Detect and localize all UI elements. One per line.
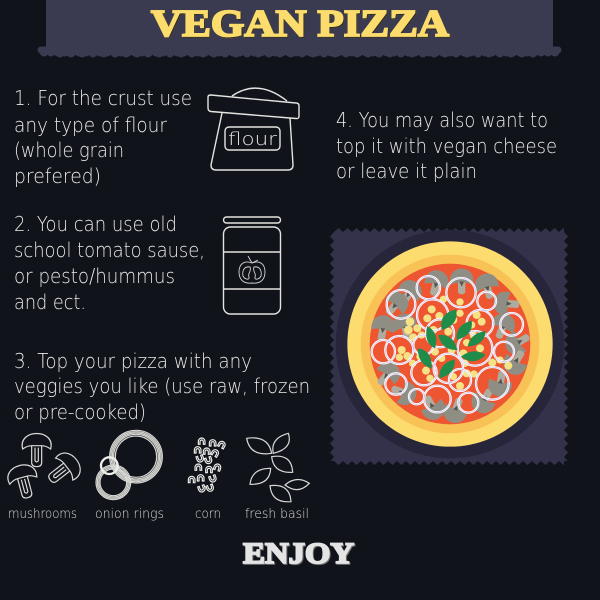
step 1 text: [14, 86, 192, 188]
mushrooms: [369, 268, 535, 426]
ingredient icons: [5, 430, 309, 502]
icon: mushrooms: [5, 433, 85, 501]
icon: flour bag: flour: [228, 129, 278, 150]
ingredient labels: [8, 507, 309, 522]
step 4 text: 4. You may also want to: [336, 108, 548, 132]
icon: flour bag: [208, 88, 299, 170]
step 2 text: and ect.: [14, 290, 86, 314]
step 3 text: veggies you like (use raw, frozen: [14, 374, 310, 398]
ingredient labels: onion rings: [95, 507, 164, 522]
pizza illustration: [336, 230, 564, 458]
step 3 text: [14, 349, 310, 424]
step 3 text: 3. Top your pizza with any: [14, 349, 252, 373]
step 2 text: 2. You can use old: [14, 212, 177, 236]
step 4 text: or leave it plain: [336, 159, 477, 183]
icon: fresh basil: [247, 433, 309, 502]
step 1 text: 1. For the crust use: [14, 86, 192, 110]
step 4 text: [336, 108, 557, 183]
banner: [41, 0, 558, 53]
tomato sauce: [370, 264, 530, 424]
plate: [336, 230, 564, 458]
ingredient labels: fresh basil: [245, 507, 309, 522]
step 2 text: or pesto/hummus: [14, 264, 175, 288]
title: VEGAN PIZZA: [151, 3, 450, 45]
step 2 text: [14, 212, 205, 314]
napkin: [330, 228, 568, 465]
basil leaves: [418, 309, 486, 378]
icon: corn: [188, 438, 226, 493]
onion rings: [372, 276, 523, 413]
icon: onion rings: [96, 430, 162, 500]
ingredient labels: corn: [195, 507, 221, 522]
corn: [396, 296, 512, 390]
step 1 text: prefered): [14, 164, 101, 188]
step 3 text: or pre-cooked): [14, 400, 146, 424]
ingredient labels: mushrooms: [8, 507, 77, 522]
step 1 text: (whole grain: [14, 138, 124, 162]
enjoy heading: ENJOY: [243, 537, 354, 570]
step 1 text: any type of flour: [14, 113, 168, 137]
step 4 text: top it with vegan cheese: [336, 134, 557, 158]
step 2 text: school tomato sause,: [14, 238, 205, 262]
icon: tomato sauce jar: [224, 217, 280, 314]
crust: [347, 241, 553, 447]
